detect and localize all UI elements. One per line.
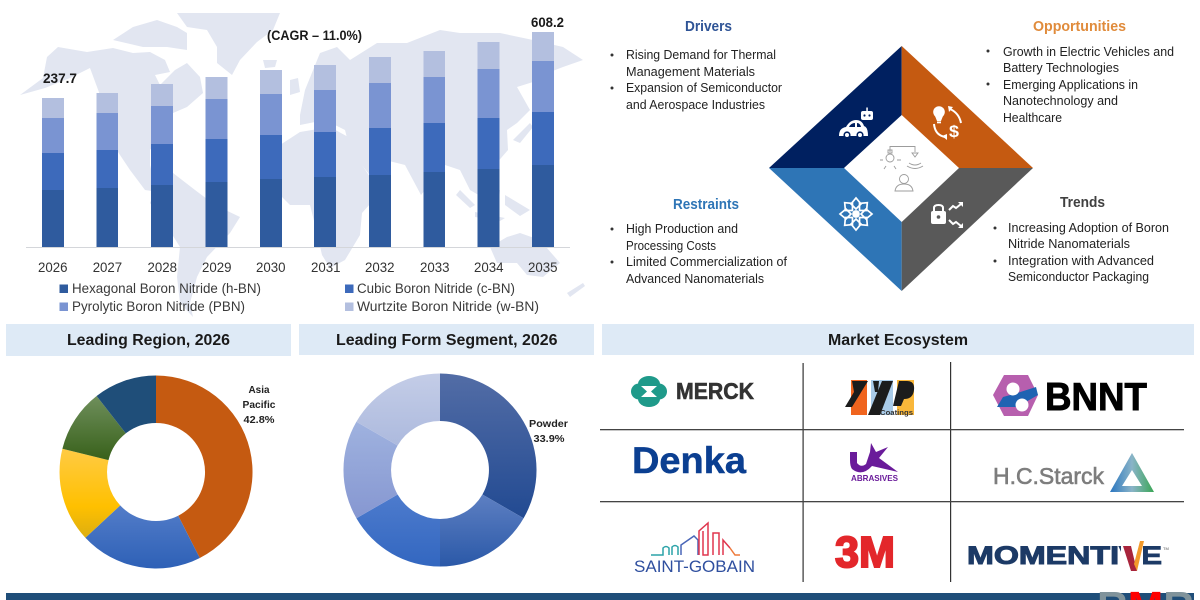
restraints text: Restraints [673,197,739,213]
panel: leading form segment [299,324,594,566]
restraints text: High Production and [626,222,738,236]
opportunities text: Emerging Applications in [1003,78,1138,92]
bar 2034 [478,42,500,247]
trends text: Increasing Adoption of Boron [1008,221,1169,235]
legend: Hexagonal Boron Nitride (h-BN) [72,281,261,296]
label: Powder [529,418,568,445]
icon: bulb and dollar cycle: $ [949,122,960,141]
logo: BNNT [993,375,1147,419]
heading [6,324,291,356]
drivers text [610,19,782,112]
x axis years: 2027 [93,260,122,275]
trends text [994,195,1169,284]
logo: Merck: MERCK [676,378,754,404]
opportunities text: Growth in Electric Vehicles and [1003,45,1174,59]
label: Powder: 33.9% [534,433,565,445]
logo: H.C.Starck: H.C.Starck [993,463,1104,489]
bar 2033 [424,51,445,247]
x axis years: 2033 [420,260,450,275]
trends text: Semiconductor Packaging [1008,270,1149,284]
heading: Leading Form Segment, 2026 [336,332,558,349]
x axis years: 2028 [148,260,177,275]
trends text: Integration with Advanced [1008,254,1154,268]
heading [299,324,594,355]
value label 2026: 237.7 [43,71,77,86]
bar 2029 [206,77,228,247]
footer bar [6,593,1194,600]
panel: market dynamics [610,19,1174,291]
logo: UK Abrasives: ABRASIVES [851,473,898,483]
icon: flower [840,198,872,230]
x axis years [38,260,558,275]
icon: robot car [839,108,873,139]
logo: 3M: 3M [835,528,895,577]
restraints text: Processing Costs [626,239,716,253]
x axis years: 2031 [311,260,340,275]
drivers text: Rising Demand for Thermal [626,48,776,62]
logo: UK Abrasives [850,443,898,483]
opportunities text: Opportunities [1033,19,1126,35]
donut chart: region [60,376,253,569]
opportunities text: Healthcare [1003,111,1062,125]
panel: market ecosystem [600,324,1194,582]
label: Asia Pacific: 42.8% [244,414,275,426]
bar 2027 [96,93,118,247]
legend: Pyrolytic Boron Nitride (PBN) [72,299,245,314]
bar 2035 [532,32,554,247]
opportunities text: Nanotechnology and [1003,94,1118,108]
drivers text: and Aerospace Industries [626,98,765,112]
bar 2028 [151,84,173,247]
bar 2026 [42,98,64,247]
logo: Denka: Denka [632,440,746,481]
logo: Momentive: MOMENTIVE [967,542,1162,570]
donut chart: form [343,374,537,566]
icon: bulb and dollar cycle [933,106,961,141]
x axis years: 2026 [38,260,68,275]
x axis years: 2034 [474,260,504,275]
drivers text: Management Materials [626,65,755,79]
label: Asia Pacific: Pacific [242,399,276,411]
world map background [20,13,585,317]
logo grid [600,362,1184,582]
heading: Market Ecosystem [828,332,968,349]
logo: Momentive: TM [1163,546,1169,551]
trends text: Trends [1060,195,1105,211]
opportunities text [986,19,1174,125]
heading: Leading Region, 2026 [67,332,230,349]
bar 2031 [314,65,336,247]
panel: leading region [6,324,291,569]
bar 2032 [369,57,391,247]
logo: BNNT: BNNT [1045,376,1147,419]
opportunities text: Battery Technologies [1003,61,1119,75]
icon: lock with trend arrows [931,202,963,228]
restraints text: Advanced Nanomaterials [626,272,764,286]
CAGR label: (CAGR – 11.0%) [267,28,362,43]
logo: ZYP Coatings: Coatings [880,408,913,417]
bar 2030 [260,70,282,247]
logo: H.C.Starck [993,453,1154,492]
legend: Wurtzite Boron Nitride (w-BN) [357,299,539,314]
value label 2035: 608.2 [531,15,564,30]
logo: ZYP Coatings [845,380,914,417]
drivers text: Expansion of Semiconductor [626,81,782,95]
icon: centre person and sensor [880,146,923,191]
chart baseline [26,247,570,248]
restraints text: Limited Commercialization of [626,255,788,269]
logo: Saint-Gobain: SAINT-GOBAIN [634,558,755,576]
panel: market size chart [20,13,585,317]
logo: Merck [631,376,754,407]
x axis years: 2035 [528,260,558,275]
diamond quadrants [769,46,1033,291]
trends text: Nitride Nanomaterials [1008,237,1130,251]
x axis years: 2032 [365,260,394,275]
heading [602,324,1194,355]
logo: Saint-Gobain [634,523,755,576]
drivers text: Drivers [685,19,732,35]
label: Powder: Powder [529,418,568,430]
restraints text [610,197,788,286]
label: Asia Pacific [242,384,276,426]
label: Asia Pacific: Asia [248,384,270,396]
legend: Cubic Boron Nitride (c-BN) [357,281,515,296]
x axis years: 2030 [256,260,286,275]
legend [60,281,539,314]
x axis years: 2029 [202,260,232,275]
